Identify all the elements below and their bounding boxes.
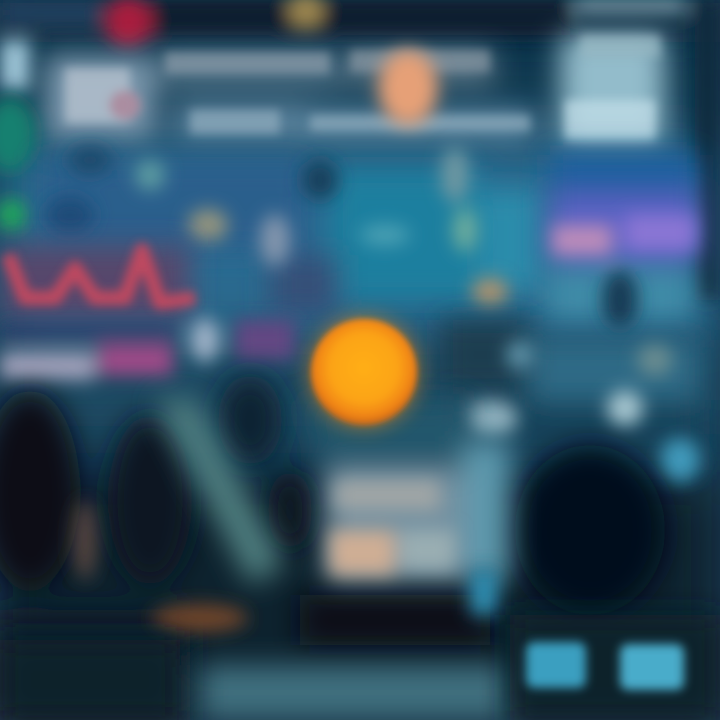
right lower cluster xyxy=(440,320,700,470)
left green icons xyxy=(0,97,36,231)
small highlights xyxy=(462,341,700,482)
peach figure circle xyxy=(378,50,438,126)
central screen panel xyxy=(300,400,510,615)
title text blocks xyxy=(45,35,665,145)
right purple chart panel xyxy=(545,155,700,330)
header band xyxy=(0,0,720,300)
central panels xyxy=(40,146,540,315)
lower left label strip xyxy=(0,318,295,380)
audience silhouettes xyxy=(0,375,665,720)
bottom floor strip xyxy=(0,640,510,720)
orange sun circle xyxy=(306,314,422,430)
bottom right cyan buttons xyxy=(510,615,720,720)
red line chart xyxy=(0,245,195,320)
